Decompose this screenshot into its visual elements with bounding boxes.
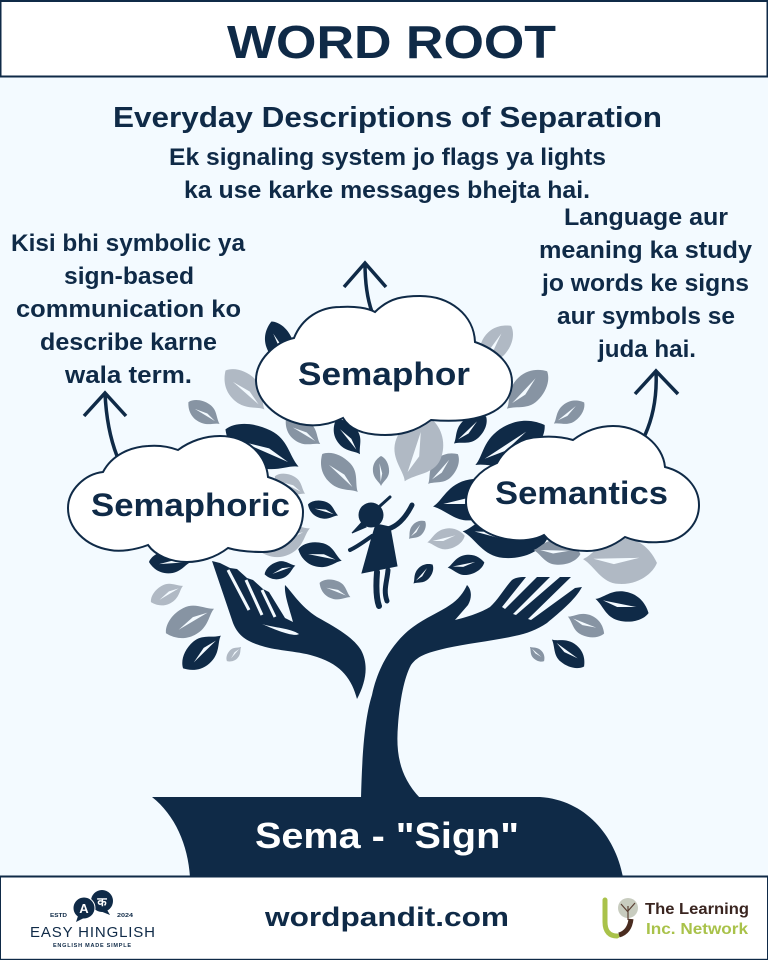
logo: easy hinglish: ESTD [50, 913, 67, 919]
logo: easy hinglish: क [96, 895, 107, 909]
logo: the learning inc network: The Learning [645, 901, 749, 918]
footer [0, 876, 768, 960]
label: Semaphoric [91, 487, 290, 523]
website: wordpandit.com [264, 902, 509, 932]
arrow: semaphoric [84, 393, 126, 456]
root label: Sema - "Sign" [255, 815, 519, 856]
text block: semaphoric definition: describe karne [40, 329, 217, 356]
text block: semaphor definition [169, 144, 606, 204]
text block: semaphoric definition: wala term. [64, 362, 192, 389]
cloud: semantics [466, 426, 699, 551]
logo: easy hinglish: EASY HINGLISH [30, 924, 155, 941]
title: WORD ROOT [227, 16, 556, 68]
child silhouette [350, 497, 412, 606]
logo: the learning inc network: Inc. Network [646, 921, 748, 938]
text block: semantics definition: meaning ka study [539, 237, 753, 264]
logo: the learning inc network [605, 898, 749, 938]
text block: semaphor definition: ka use karke messages bhejta hai. [184, 177, 590, 204]
logo: easy hinglish [30, 890, 155, 949]
label: Semaphor [298, 356, 470, 392]
text block: semaphoric definition [11, 230, 246, 389]
leaves [147, 317, 658, 679]
arrow: semantics [635, 371, 678, 435]
right arm and trunk [361, 577, 582, 798]
text block: semaphor definition: Ek signaling system jo flags ya lights [169, 144, 606, 171]
cloud: semaphor [256, 296, 512, 435]
text block: semantics definition: juda hai. [597, 336, 696, 363]
logo: easy hinglish: 2024 [117, 913, 133, 919]
tree with hands [152, 561, 623, 877]
text block: semantics definition: jo words ke signs [541, 270, 749, 297]
text block: semaphoric definition: communication ko [16, 296, 241, 323]
text block: semaphoric definition: sign-based [64, 263, 194, 290]
cloud: semaphoric [68, 436, 303, 562]
label: Semantics [495, 475, 668, 511]
logo: easy hinglish: ENGLISH MADE SIMPLE [53, 943, 131, 949]
header banner [0, 0, 768, 78]
text block: semantics definition: Language aur [564, 204, 728, 231]
heading: Everyday Descriptions of Separation [113, 102, 662, 134]
text block: semantics definition: aur symbols se [557, 303, 735, 330]
text block: semantics definition [539, 204, 753, 363]
logo: easy hinglish: A [79, 901, 89, 916]
ground [152, 797, 623, 877]
left hand [212, 561, 366, 699]
text block: semaphoric definition: Kisi bhi symbolic ya [11, 230, 246, 257]
arrow: semaphor [344, 263, 386, 312]
